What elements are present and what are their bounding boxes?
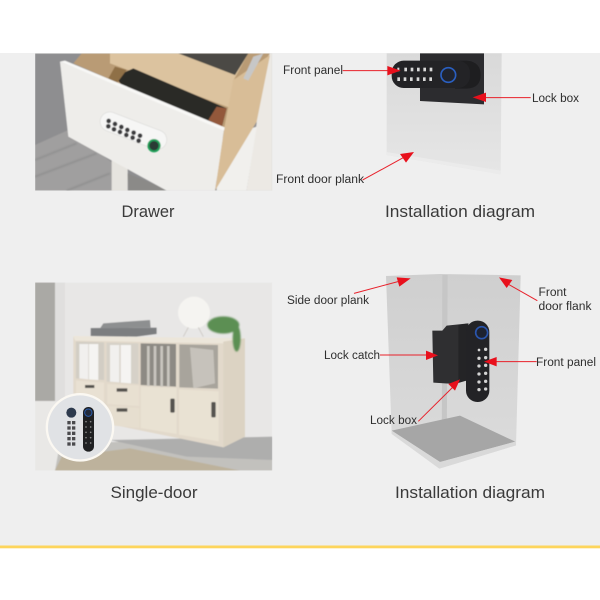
label: Lock box lower: Lock box xyxy=(370,415,417,427)
caption: Drawer: Drawer xyxy=(122,202,175,221)
icon: white drawer keypad xyxy=(97,109,170,152)
label: Front panel: Front panel xyxy=(283,65,343,77)
plant xyxy=(207,316,241,352)
lock catch and lock box xyxy=(432,323,468,384)
photo: drawer with keypad lock xyxy=(35,53,272,191)
yellow footer rule xyxy=(0,546,600,548)
arrow: front door plank xyxy=(363,152,414,180)
label: Side door plank: Side door plank xyxy=(287,295,369,307)
arrow: lock box xyxy=(418,379,460,421)
lock box xyxy=(420,53,484,104)
arrow: front door flank xyxy=(499,277,537,301)
cabinet xyxy=(73,338,224,448)
label: Front door flank: Front xyxy=(538,287,567,299)
arrow: lock box xyxy=(473,93,531,102)
front panel keypad xyxy=(466,321,489,402)
label: Front door flank: door flank xyxy=(538,301,592,313)
label: Lock catch: Lock catch xyxy=(324,350,380,362)
translucent cabinet box xyxy=(386,274,521,469)
label: Front door plank: Front door plank xyxy=(276,174,364,186)
diagram: drawer lock installation xyxy=(343,53,531,180)
label: Lock box: Lock box xyxy=(532,93,579,105)
label: Front panel right: Front panel xyxy=(536,357,596,369)
caption: Installation diagram, bottom: Installation diagram xyxy=(395,483,545,502)
caption: Installation diagram, top: Installation diagram xyxy=(385,202,535,221)
caption: Single-door: Single-door xyxy=(110,483,198,502)
front door plank xyxy=(387,53,502,174)
arrow: lock catch xyxy=(380,351,438,360)
arrow: side door plank xyxy=(354,277,411,293)
photo: single-door cabinet in living room xyxy=(35,282,272,471)
front panel keypad xyxy=(392,61,481,89)
arrow: front panel xyxy=(484,357,537,366)
lamp xyxy=(178,297,210,329)
icon: inset circle with two keypads xyxy=(46,393,114,462)
diagram: single-door lock installation xyxy=(354,274,537,469)
turntable xyxy=(91,328,157,337)
label: Front door flank xyxy=(538,287,592,313)
arrow: front panel xyxy=(343,66,401,75)
